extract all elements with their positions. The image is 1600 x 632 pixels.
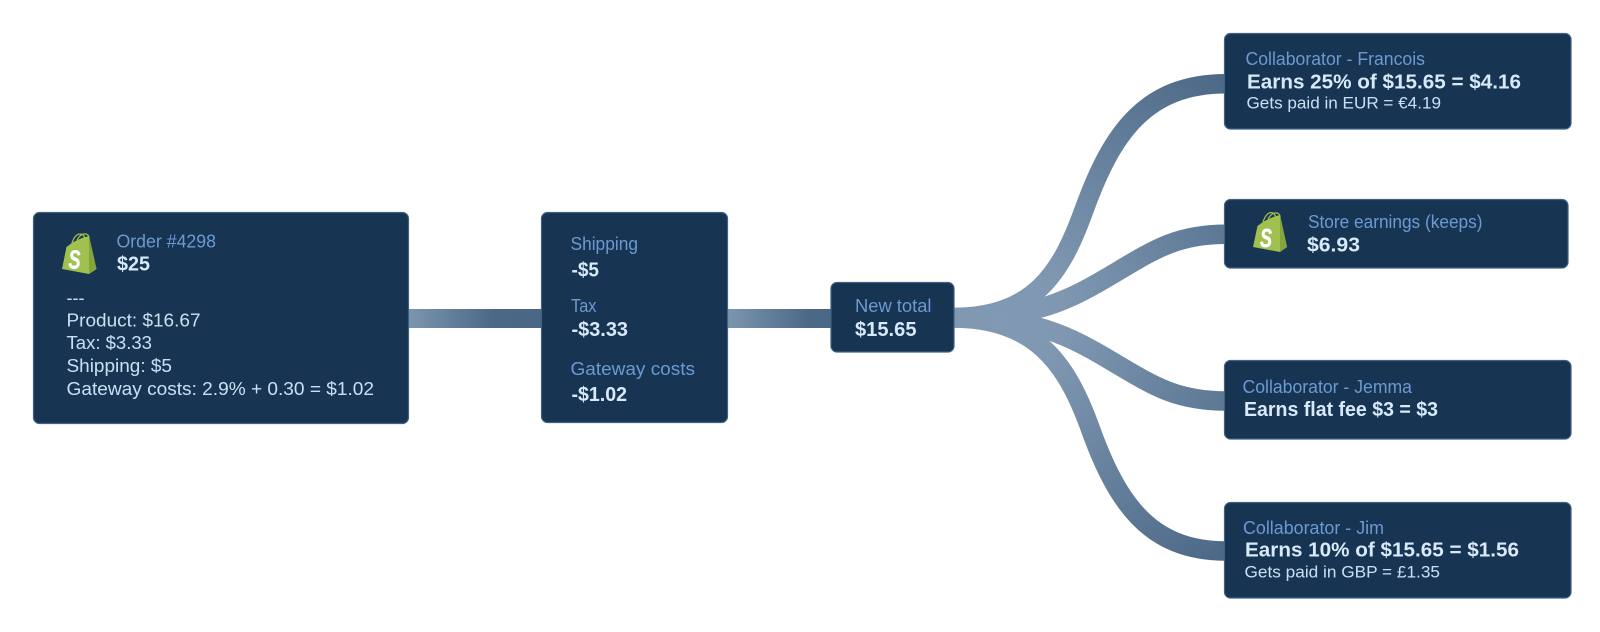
icon: Shopify bag: S xyxy=(1260,223,1272,253)
order breakdown: Product: $16.67 xyxy=(66,310,200,330)
panel: new total: $15.65 xyxy=(855,319,916,341)
connector: deductions to new total xyxy=(727,309,832,328)
order breakdown: Tax: $3.33 xyxy=(66,332,152,353)
shipping deduction xyxy=(570,233,638,282)
gateway deduction: Gateway costs xyxy=(570,358,695,379)
connector: order to deductions xyxy=(408,309,542,328)
panel: Jim xyxy=(1224,502,1571,598)
panel: Jemma: Earns flat fee $3 = $3 xyxy=(1244,399,1438,421)
panel: Jim: Collaborator - Jim xyxy=(1243,517,1384,538)
shipping deduction: -$5 xyxy=(572,260,599,282)
panel: deductions xyxy=(542,212,728,422)
panel: Francois: Collaborator - Francois xyxy=(1246,48,1425,69)
panel: order xyxy=(34,212,408,424)
flow curves: new total to recipients xyxy=(952,84,1226,551)
shipping deduction: Shipping xyxy=(570,233,638,254)
icon: Shopify bag xyxy=(62,234,96,274)
gateway deduction: -$1.02 xyxy=(572,384,627,406)
icon: Shopify bag xyxy=(1253,212,1287,253)
order breakdown xyxy=(66,287,374,399)
order breakdown: Shipping: $5 xyxy=(66,355,172,376)
order breakdown: --- xyxy=(66,287,84,308)
tax deduction: Tax xyxy=(571,295,597,316)
panel: store earnings: $6.93 xyxy=(1307,234,1360,256)
panel: Francois: Earns 25% of $15.65 = $4.16 xyxy=(1247,72,1521,94)
order breakdown: Gateway costs: 2.9% + 0.30 = $1.02 xyxy=(66,378,374,399)
panel: Jim: Gets paid in GBP = £1.35 xyxy=(1244,562,1440,582)
panel: Jemma: Collaborator - Jemma xyxy=(1242,376,1413,397)
panel: Francois xyxy=(1224,34,1571,129)
panel: Francois: Gets paid in EUR = €4.19 xyxy=(1246,94,1441,112)
tax deduction xyxy=(571,295,628,341)
panel: Jemma xyxy=(1224,360,1571,439)
order amount: $25 xyxy=(117,254,150,276)
icon: Shopify bag: S xyxy=(68,244,81,274)
panel: new total: New total xyxy=(855,295,932,316)
order heading: Order #4298 xyxy=(116,230,216,252)
panel: new total xyxy=(831,282,954,352)
tax deduction: -$3.33 xyxy=(572,319,628,341)
panel: store earnings xyxy=(1224,200,1568,268)
panel: Jim: Earns 10% of $15.65 = $1.56 xyxy=(1245,540,1519,562)
gateway deduction xyxy=(570,358,695,406)
panel: store earnings: Store earnings (keeps) xyxy=(1308,211,1482,232)
